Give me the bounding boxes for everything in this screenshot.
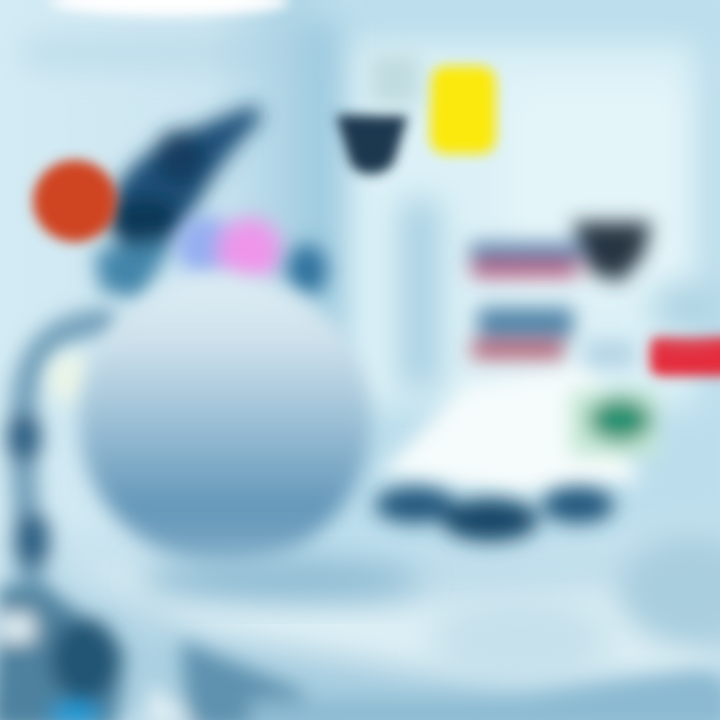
tube on left xyxy=(23,322,105,600)
purple and pink blob xyxy=(175,215,282,282)
wall column shading xyxy=(25,20,440,390)
white work surface xyxy=(380,365,640,495)
large sphere xyxy=(79,275,371,565)
microscope arm xyxy=(95,105,262,300)
bottom dark equipment xyxy=(0,585,720,720)
background: right wall panel xyxy=(300,0,720,720)
small pale highlight by tube xyxy=(48,352,92,404)
lab table surface xyxy=(0,520,720,720)
dark dishes on table xyxy=(375,487,614,541)
upper shelf items xyxy=(470,222,652,282)
ceiling light xyxy=(50,0,290,16)
lower shelf items xyxy=(472,308,635,368)
yellow card xyxy=(430,66,496,154)
background: left wall xyxy=(0,0,340,720)
dark cup xyxy=(336,115,408,174)
red label at right edge xyxy=(650,336,720,376)
green container xyxy=(570,390,658,456)
dark blue knob xyxy=(287,244,327,296)
red ball xyxy=(33,160,117,242)
sphere shadow xyxy=(140,558,420,602)
right equipment xyxy=(430,285,720,685)
pale panel above cup xyxy=(370,55,420,105)
